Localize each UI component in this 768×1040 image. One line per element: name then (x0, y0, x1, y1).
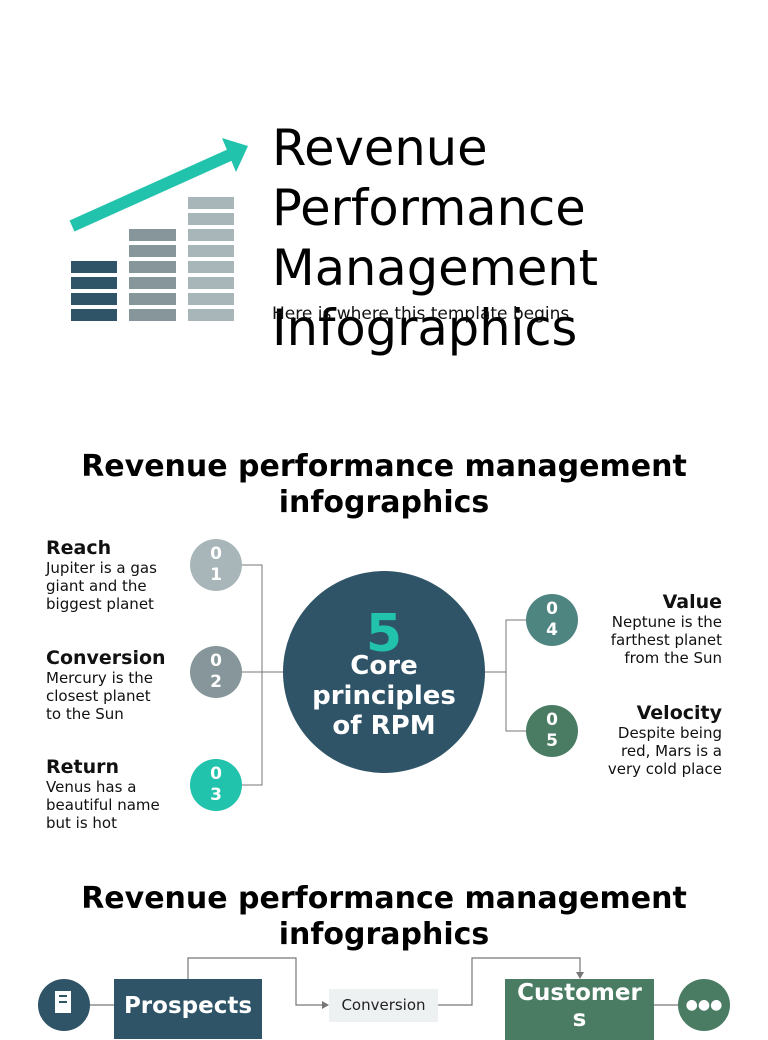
title: Infographics (272, 299, 577, 357)
badge 02: 0 (210, 651, 222, 671)
central circle (283, 571, 485, 773)
title: Revenue (272, 119, 488, 177)
text: conversion: closest planet (46, 687, 151, 705)
text: reach: giant and the (46, 577, 147, 595)
badge 03: 0 (210, 764, 222, 784)
icon: bar chart (71, 197, 234, 321)
heading: section 2: infographics (279, 917, 489, 952)
text: velocity: Despite being (618, 724, 722, 742)
badge 01 (190, 539, 242, 591)
text: velocity (608, 702, 722, 778)
heading: section 2 (81, 881, 687, 952)
connector lines: principles (242, 565, 526, 785)
text: velocity: very cold place (608, 760, 722, 778)
text: reach (45, 537, 157, 613)
badge 02: 2 (210, 672, 222, 692)
text: return (46, 756, 160, 832)
badge 05: 0 (546, 710, 558, 730)
badge 05 (526, 705, 578, 757)
box: customers: Customer (517, 980, 642, 1006)
text: return: but is hot (46, 814, 117, 832)
central circle: of RPM (332, 711, 436, 741)
badge 03 (190, 759, 242, 811)
title: Performance (272, 179, 586, 237)
badge 01: 1 (210, 565, 222, 585)
box: customers: s (573, 1006, 586, 1032)
badge 05: 5 (546, 731, 558, 751)
flow connectors (90, 958, 678, 1005)
text: return: Venus has a (46, 778, 136, 796)
text: conversion: Conversion (46, 647, 166, 669)
icon: people circle (678, 979, 730, 1031)
badge 04: 4 (546, 620, 558, 640)
text: velocity: Velocity (637, 702, 722, 724)
central circle: principles (312, 681, 456, 711)
text: conversion: Mercury is the (46, 669, 153, 687)
title (272, 119, 598, 357)
text: value: farthest planet (611, 631, 722, 649)
central circle: 5 (366, 604, 402, 664)
arrow: growth (72, 138, 248, 226)
box: conversion (329, 989, 438, 1022)
heading: section 1: infographics (279, 485, 489, 520)
text: value: Value (663, 591, 722, 613)
badge 02 (190, 646, 242, 698)
box: conversion: Conversion (341, 996, 426, 1014)
icon: people circle: ●●● (686, 997, 722, 1013)
text: return: Return (46, 756, 119, 778)
badge 04: 0 (546, 599, 558, 619)
badge 03: 3 (210, 785, 222, 805)
heading: section 2: Revenue performance management (81, 881, 687, 916)
central circle: Core (350, 651, 418, 681)
box: customers (505, 979, 654, 1040)
text: conversion (46, 647, 166, 723)
text: reach: Jupiter is a gas (46, 559, 157, 577)
text: value: from the Sun (624, 649, 722, 667)
badge 04 (526, 594, 578, 646)
heading: section 1: Revenue performance management (81, 449, 687, 484)
icon: document circle (38, 979, 90, 1031)
text: reach: biggest planet (46, 595, 154, 613)
text: velocity: red, Mars is a (621, 742, 722, 760)
heading: section 1 (81, 449, 687, 520)
text: reach: Reach (46, 537, 111, 559)
badge 01: 0 (210, 544, 222, 564)
box: prospects (114, 979, 262, 1039)
text: return: beautiful name (46, 796, 160, 814)
text: conversion: to the Sun (46, 705, 124, 723)
subtitle: Here is where this template begins (272, 304, 569, 324)
title: Management (272, 239, 598, 297)
box: prospects: Prospects (124, 993, 252, 1019)
text: value: Neptune is the (612, 613, 722, 631)
text: value (611, 591, 722, 667)
